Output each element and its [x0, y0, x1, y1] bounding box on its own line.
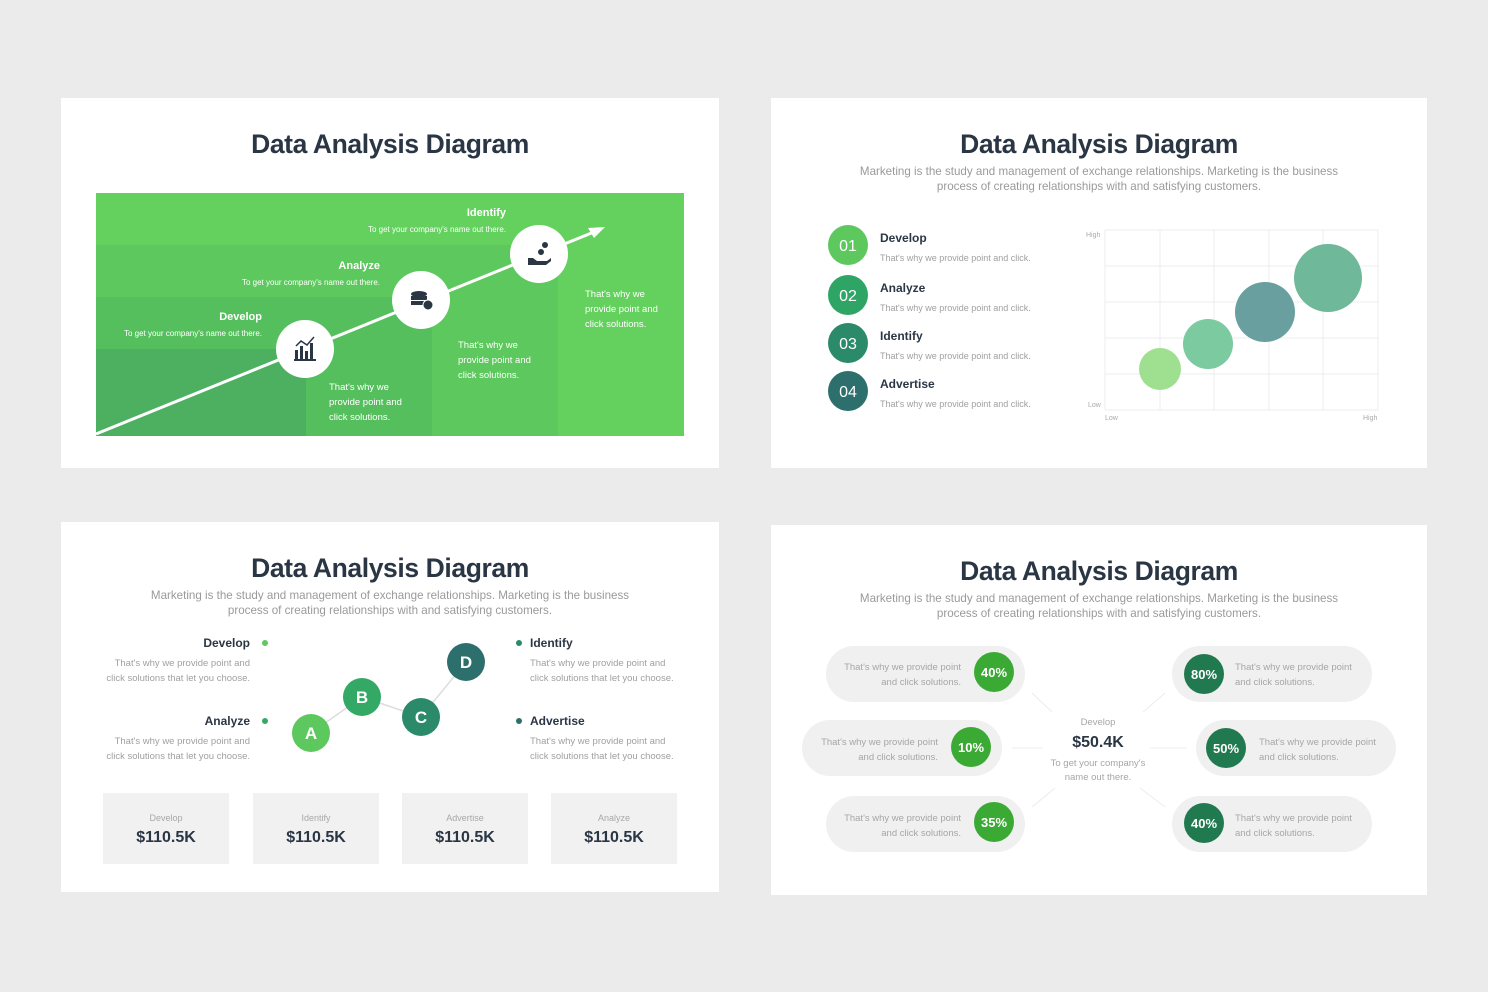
- percentage pills: [802, 646, 1396, 852]
- labels: To get your company's name out there.: [124, 329, 262, 338]
- ABCD diagram: Analyze: [205, 714, 250, 728]
- percentage pills: 40%: [1191, 816, 1217, 831]
- title: Data Analysis Diagram: [960, 556, 1238, 586]
- percentage pills: 35%: [981, 815, 1007, 830]
- labels: click solutions.: [458, 370, 519, 381]
- title: Data Analysis Diagram: [251, 553, 529, 583]
- step chart: [96, 193, 684, 436]
- labels: [124, 207, 658, 423]
- labels: That's why we: [458, 340, 518, 351]
- subtitle: Marketing is the study and management of exchange relationships. Marketing is the business: [151, 589, 629, 602]
- value boxes: [103, 793, 677, 864]
- percentage pills: and click solutions.: [1235, 677, 1315, 688]
- percentage pills: That's why we provide point: [1259, 737, 1376, 748]
- numbered list: 04: [839, 384, 857, 401]
- ABCD diagram: Develop: [203, 636, 250, 650]
- numbered list: That's why we provide point and click.: [880, 399, 1031, 409]
- numbered list: Advertise: [880, 377, 935, 391]
- ABCD diagram: click solutions that let you choose.: [530, 673, 674, 684]
- subtitle: Marketing is the study and management of exchange relationships. Marketing is the business: [860, 592, 1338, 605]
- value boxes: Develop: [149, 813, 183, 823]
- labels: Identify: [467, 207, 507, 219]
- numbered list: That's why we provide point and click.: [880, 351, 1031, 361]
- title: Data Analysis Diagram: [960, 129, 1238, 159]
- labels: provide point and: [458, 355, 531, 366]
- bubble chart: High: [1363, 415, 1378, 422]
- panel: rising steps: [61, 98, 719, 468]
- ABCD diagram: That's why we provide point and: [115, 736, 250, 747]
- value boxes: $110.5K: [286, 829, 346, 846]
- percentage pills: 40%: [981, 665, 1007, 680]
- numbered list: That's why we provide point and click.: [880, 253, 1031, 263]
- value boxes: $110.5K: [136, 829, 196, 846]
- labels: To get your company's name out there.: [242, 278, 380, 287]
- panel: percentages: [771, 525, 1427, 895]
- subtitle: process of creating relationships with and satisfying customers.: [937, 607, 1261, 620]
- percentage pills: 80%: [1191, 667, 1217, 682]
- ABCD diagram: click solutions that let you choose.: [530, 751, 674, 762]
- numbered list: 03: [839, 336, 857, 353]
- ABCD diagram: That's why we provide point and: [530, 658, 665, 669]
- bubble chart: [1086, 230, 1378, 422]
- labels: To get your company's name out there.: [368, 225, 506, 234]
- subtitle: [860, 592, 1338, 620]
- numbered list: Analyze: [880, 281, 926, 295]
- bubble chart: High: [1086, 232, 1101, 239]
- percentage pills: 50%: [1213, 741, 1239, 756]
- labels: That's why we: [585, 289, 645, 300]
- labels: click solutions.: [585, 319, 646, 330]
- labels: click solutions.: [329, 412, 390, 423]
- percentage pills: That's why we provide point: [1235, 813, 1352, 824]
- percentage pills: 10%: [958, 740, 984, 755]
- subtitle: [860, 165, 1338, 193]
- numbered list: 02: [839, 288, 857, 305]
- percentage pills: and click solutions.: [881, 828, 961, 839]
- ABCD diagram: C: [415, 708, 427, 727]
- ABCD diagram: [106, 636, 674, 762]
- value boxes: Analyze: [598, 813, 630, 823]
- labels: Develop: [219, 311, 262, 323]
- ABCD diagram: That's why we provide point and: [115, 658, 250, 669]
- value boxes: Identify: [301, 813, 331, 823]
- ABCD diagram: Advertise: [530, 714, 585, 728]
- labels: That's why we: [329, 382, 389, 393]
- ABCD diagram: click solutions that let you choose.: [106, 751, 250, 762]
- percentage pills: and click solutions.: [1259, 752, 1339, 763]
- percentage pills: That's why we provide point: [1235, 662, 1352, 673]
- percentage pills: That's why we provide point: [844, 813, 961, 824]
- value boxes: $110.5K: [435, 829, 495, 846]
- percentage pills: That's why we provide point: [821, 737, 938, 748]
- percentage pills: and click solutions.: [881, 677, 961, 688]
- percentage pills: and click solutions.: [1235, 828, 1315, 839]
- numbered list: Develop: [880, 231, 927, 245]
- ABCD diagram: B: [356, 688, 368, 707]
- ABCD diagram: click solutions that let you choose.: [106, 673, 250, 684]
- percentage pills: name out there.: [1065, 772, 1131, 783]
- labels: provide point and: [329, 397, 402, 408]
- icon circles: [276, 225, 568, 378]
- value boxes: $110.5K: [584, 829, 644, 846]
- percentage pills: Develop: [1081, 717, 1115, 728]
- bubble chart: Low: [1105, 415, 1119, 422]
- panel: ABCD: [61, 522, 719, 892]
- subtitle: [151, 589, 629, 617]
- subtitle: process of creating relationships with and satisfying customers.: [228, 604, 552, 617]
- ABCD diagram: Identify: [530, 636, 573, 650]
- percentage pills: To get your company's: [1051, 758, 1146, 769]
- numbered list: Identify: [880, 329, 923, 343]
- labels: provide point and: [585, 304, 658, 315]
- numbered list: 01: [839, 238, 857, 255]
- bubble chart: Low: [1088, 402, 1102, 409]
- labels: Analyze: [338, 260, 380, 272]
- numbered list: That's why we provide point and click.: [880, 303, 1031, 313]
- value boxes: Advertise: [446, 813, 484, 823]
- percentage pills: $50.4K: [1072, 734, 1124, 751]
- percentage pills: That's why we provide point: [844, 662, 961, 673]
- percentage pills: and click solutions.: [858, 752, 938, 763]
- ABCD diagram: D: [460, 653, 472, 672]
- ABCD diagram: That's why we provide point and: [530, 736, 665, 747]
- ABCD diagram: A: [305, 724, 317, 743]
- title: Data Analysis Diagram: [251, 129, 529, 159]
- subtitle: process of creating relationships with and satisfying customers.: [937, 180, 1261, 193]
- subtitle: Marketing is the study and management of exchange relationships. Marketing is the business: [860, 165, 1338, 178]
- panel: bubble chart list: [771, 98, 1427, 468]
- numbered list: [828, 225, 1378, 422]
